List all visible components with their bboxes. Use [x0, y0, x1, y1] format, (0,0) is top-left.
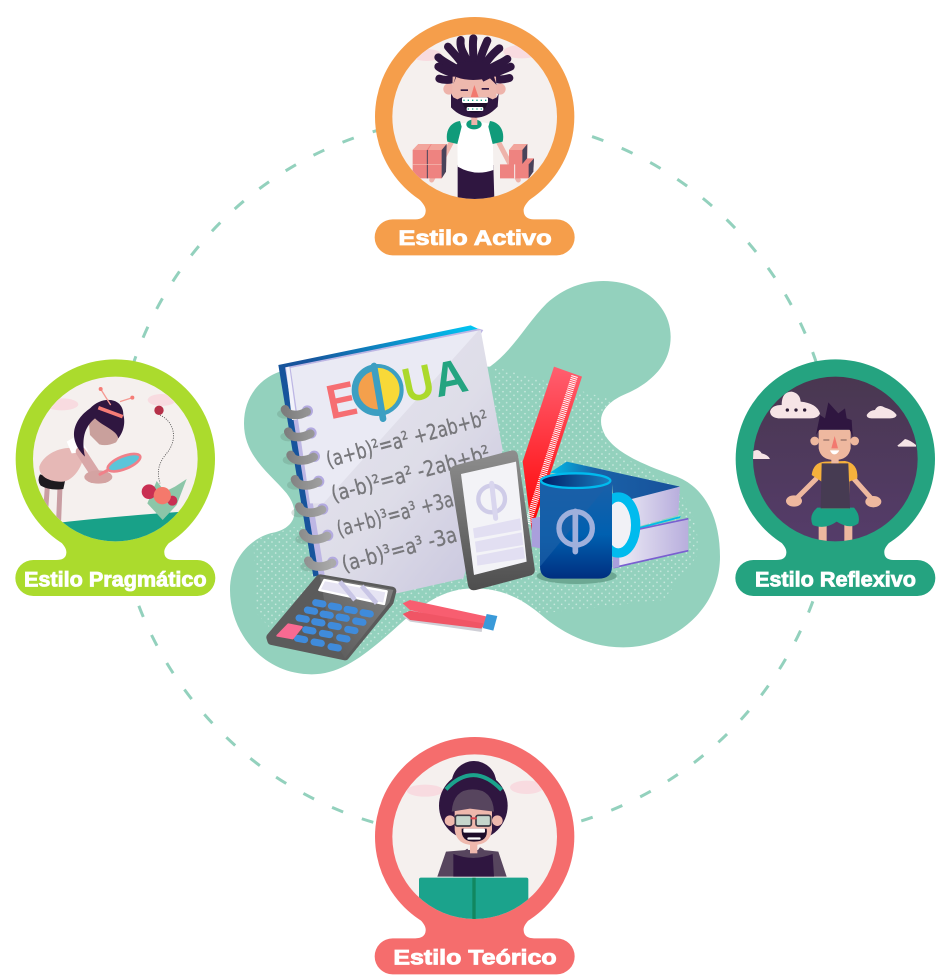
head: [452, 77, 497, 117]
badge frame: [15, 359, 215, 596]
nose and eyes: [471, 85, 479, 97]
portrait: meditating boy: [750, 375, 920, 545]
badge frame: [735, 359, 935, 596]
ears: [443, 84, 452, 95]
open mouth: [462, 829, 487, 842]
teal book: [419, 878, 528, 923]
math formulas: (a-b)³=a³ -3a: [339, 523, 460, 577]
label: Estilo Activo: [398, 227, 552, 250]
calculator: [271, 577, 393, 658]
dreadlock hair: [438, 38, 511, 80]
magnifying glass: [100, 450, 142, 475]
central illustration: study materials: [230, 281, 720, 674]
head and hair: [89, 418, 118, 446]
glasses: [455, 815, 491, 826]
ruler: [523, 367, 582, 531]
label: Estilo Pragmático: [24, 569, 207, 592]
portrait: girl reading book: [390, 750, 560, 923]
hair and bun: [452, 761, 496, 780]
pens: [403, 600, 497, 632]
badge: Estilo Pragmático: [15, 359, 215, 596]
spiky hair: [816, 402, 853, 437]
dot texture: [253, 367, 698, 653]
dashed connecting circle: [115, 117, 835, 837]
mug: [537, 473, 636, 584]
nose, eyes and smile: [831, 436, 838, 448]
ladybug with dotted flight path: [154, 406, 173, 483]
portrait: girl with magnifying glass: [30, 375, 200, 548]
calculator red key: [277, 624, 302, 638]
math formulas: [323, 406, 493, 577]
calculator keys: [297, 603, 370, 648]
badge: Estilo Activo: [375, 17, 575, 255]
tablet: [450, 450, 535, 590]
math formulas: (a+b)³=a³ +3a: [334, 487, 456, 542]
arm: [81, 452, 96, 475]
clouds: [753, 392, 916, 459]
badge frame: [375, 17, 575, 255]
legs: [45, 487, 60, 520]
flowers: [142, 479, 187, 520]
head: [810, 437, 819, 445]
math formulas: (a-b)²=a² -2ab+b²: [328, 441, 493, 507]
spiral binding: [277, 405, 338, 571]
EQUA logo: A: [428, 348, 472, 408]
label: Estilo Teórico: [393, 946, 557, 969]
arms: [795, 479, 873, 500]
notebook: [277, 325, 503, 593]
arms: [432, 142, 518, 180]
stacked cubes left: [413, 144, 447, 178]
face: [455, 808, 492, 845]
label: Estilo Reflexivo: [755, 569, 916, 592]
body: [437, 850, 507, 877]
EQUA logo: E: [322, 371, 362, 430]
portrait: boy with blocks: [390, 30, 560, 203]
EQUA logo: [322, 348, 472, 430]
stacked cubes right: [500, 144, 534, 178]
torso: [39, 448, 83, 482]
math formulas: (a+b)²=a² +2ab+b²: [323, 406, 491, 473]
teal blob background: [230, 281, 720, 674]
EQUA logo: U: [398, 354, 439, 413]
tank top: [812, 461, 857, 508]
shorts: [38, 474, 65, 490]
legs and shorts: [823, 522, 848, 545]
pants: [458, 165, 494, 199]
badge: Estilo Teórico: [375, 737, 575, 974]
badge frame: [375, 737, 575, 974]
ground: [62, 512, 178, 542]
t-shirt: [457, 122, 493, 173]
badge: Estilo Reflexivo: [735, 359, 935, 596]
beard and braces smile: [451, 93, 499, 118]
ears: [445, 815, 455, 826]
stack of books: [532, 462, 688, 568]
